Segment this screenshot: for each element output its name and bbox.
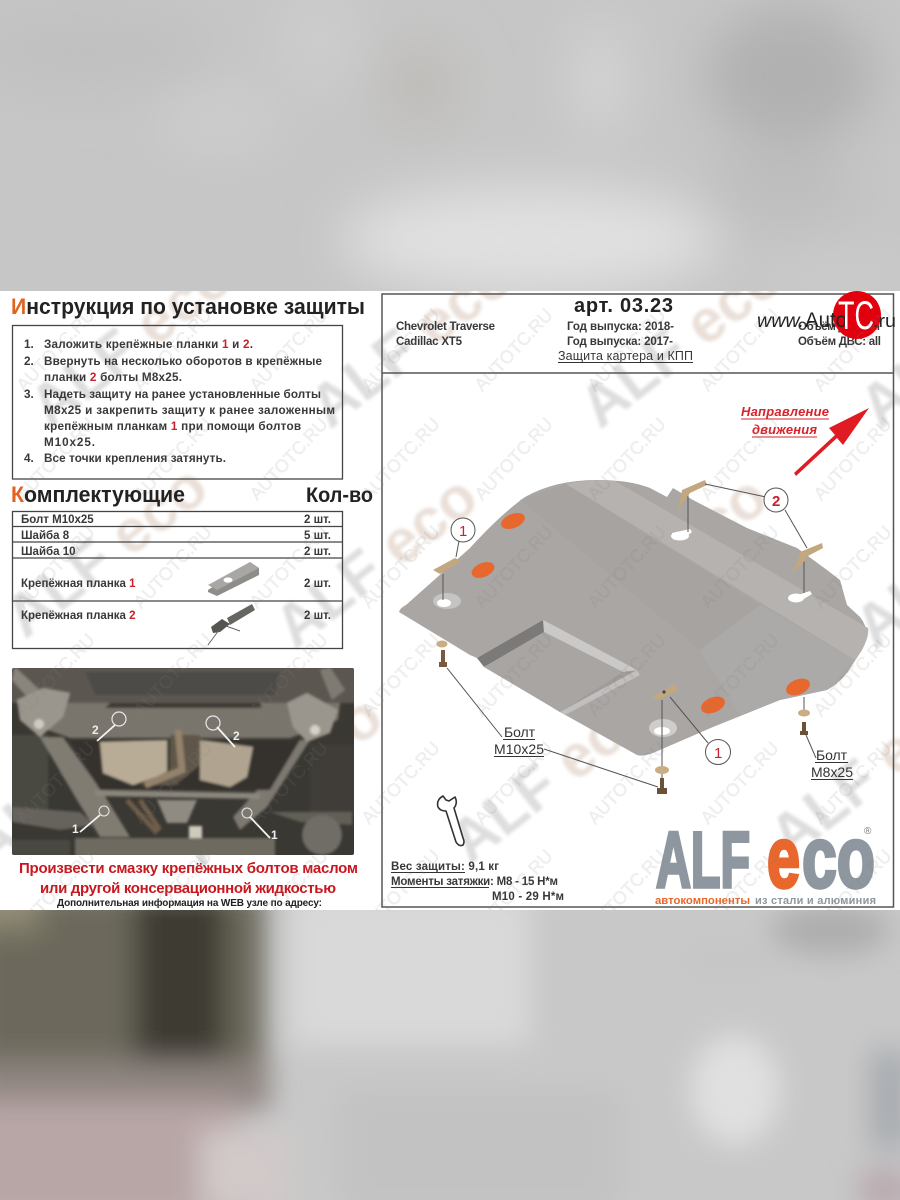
plate right section — [700, 605, 855, 715]
AUTOTC.RU watermarks: AUTOTC.RU — [246, 630, 332, 720]
panel: product drawing frame — [382, 294, 894, 907]
AUTOTC.RU watermarks: AUTOTC.RU — [358, 846, 444, 936]
AUTOTC.RU watermarks: AUTOTC.RU — [358, 738, 444, 828]
background ALF eco watermarks — [0, 242, 900, 880]
AUTOTC.RU watermarks: AUTOTC.RU — [584, 305, 670, 395]
AUTOTC.RU watermarks: AUTOTC.RU — [246, 738, 332, 828]
blurred background top — [0, 0, 900, 310]
callout: number 1 lower: 1 — [714, 745, 722, 762]
logo: AutoTC website stamp — [757, 291, 896, 339]
step list text: 1. — [24, 338, 34, 351]
table: components list: Шайба 10 — [21, 546, 76, 558]
table: components list: Крепёжная планка 1 — [21, 578, 136, 590]
heading: components: Комплектующие — [11, 482, 185, 507]
label: bolt M10x25: Болт — [504, 724, 536, 740]
header: vehicle models: Chevrolet Traverse — [396, 321, 495, 333]
icon: mounting plank 1 — [208, 562, 259, 596]
AUTOTC.RU watermarks: AUTOTC.RU — [130, 630, 216, 720]
header: model years and product: Год выпуска: 2017- — [567, 336, 673, 348]
header: article number: арт. 03.23 — [574, 295, 673, 317]
callout: number 1 lower — [706, 740, 730, 764]
AUTOTC.RU watermarks: AUTOTC.RU — [130, 738, 216, 828]
mounting point markers — [80, 712, 270, 838]
AUTOTC.RU watermarks: AUTOTC.RU — [584, 738, 670, 828]
table: components list: 2 шт. — [304, 546, 331, 558]
AUTOTC.RU watermarks: AUTOTC.RU — [471, 630, 557, 720]
logo: ALF eco: e — [767, 810, 800, 906]
table: components list: Шайба 8 — [21, 530, 70, 542]
header: engine volume — [798, 321, 881, 348]
web info note: Дополнительная информация на WEB узле по адресу: — [57, 897, 322, 909]
header: engine volume: Объём ДВС: all — [798, 321, 880, 333]
label: bolt M8x25: M8x25 — [811, 764, 853, 780]
step list text: 2. — [24, 355, 34, 368]
plate left band — [520, 484, 760, 650]
photo labels: 2 — [92, 723, 99, 737]
AUTOTC.RU watermarks: AUTOTC.RU — [13, 305, 99, 395]
specs: weight and tightening torque — [391, 861, 564, 903]
lubrication note: или другой консервационной жидкостью — [40, 880, 336, 897]
AUTOTC.RU watermarks: AUTOTC.RU — [697, 305, 783, 395]
table: components list — [12, 512, 342, 648]
AUTOTC.RU watermarks: AUTOTC.RU — [13, 738, 99, 828]
AUTOTC.RU watermarks: AUTOTC.RU — [697, 522, 783, 612]
AUTOTC.RU watermarks: AUTOTC.RU — [810, 414, 896, 504]
header: engine volume: Объём ДВС: all — [798, 336, 881, 348]
step list text: планки 2 болты M8x25. — [44, 371, 182, 384]
table: components list: 2 шт. — [304, 578, 331, 590]
AUTOTC.RU watermarks: AUTOTC.RU — [810, 738, 896, 828]
callout: number 2 — [764, 488, 788, 512]
AUTOTC.RU watermarks: AUTOTC.RU — [130, 414, 216, 504]
background ALF eco watermarks: ALF eco — [567, 242, 795, 440]
mounting holes — [433, 529, 812, 737]
specs: weight and tightening torque: Моменты затяжки: M8 - 15 Н*м — [391, 876, 558, 888]
AUTOTC.RU watermarks: AUTOTC.RU — [584, 414, 670, 504]
direction of travel label: Направление — [741, 404, 829, 419]
step list text: 3. — [24, 388, 34, 401]
AUTOTC.RU watermarks: AUTOTC.RU — [130, 305, 216, 395]
background ALF eco watermarks: ALF eco — [17, 242, 245, 440]
AUTOTC.RU watermarks: AUTOTC.RU — [471, 846, 557, 936]
logo: ALF eco — [655, 810, 876, 907]
logo: AutoTC website stamp: TC — [838, 294, 874, 338]
label: bolt M8x25: Болт — [816, 747, 848, 763]
AUTOTC.RU watermarks: AUTOTC.RU — [13, 630, 99, 720]
logo: ALF eco: ALF — [656, 815, 750, 904]
bolts and washers — [436, 640, 810, 794]
logo: ALF eco: автокомпоненты — [655, 895, 750, 907]
AUTOTC.RU watermarks: AUTOTC.RU — [246, 846, 332, 936]
label: bolt M10x25: M10x25 — [494, 741, 544, 757]
lubrication note — [19, 860, 358, 897]
specs: weight and tightening torque: M10 - 29 Н*м — [492, 891, 564, 903]
logo: ALF eco: ® — [864, 826, 872, 837]
background ALF eco watermarks: ALF eco — [437, 677, 665, 875]
logo: AutoTC website stamp: Auto — [805, 309, 847, 332]
logo: AutoTC website stamp: .ru — [873, 311, 896, 331]
logo: AutoTC website stamp: www. — [757, 311, 804, 332]
photo labels: 1 — [271, 828, 278, 842]
direction of travel label: движения — [752, 422, 817, 437]
header: model years and product: Защита картера и КПП — [558, 349, 693, 363]
leader lines — [447, 484, 816, 787]
background ALF eco watermarks: ALF eco — [167, 682, 395, 880]
step list text: M10x25. — [44, 436, 95, 449]
AUTOTC.RU watermarks — [13, 305, 896, 936]
logo: ALF eco: co — [802, 810, 875, 906]
blurred background bottom — [0, 890, 900, 1200]
header: model years and product — [558, 321, 693, 363]
direction of travel label — [741, 404, 829, 437]
AUTOTC.RU watermarks: AUTOTC.RU — [471, 738, 557, 828]
AUTOTC.RU watermarks: AUTOTC.RU — [810, 522, 896, 612]
photo labels — [72, 723, 278, 842]
photo labels: 2 — [233, 729, 240, 743]
step list text: крепёжным планкам 1 при помощи болтов — [44, 420, 301, 433]
white sheet — [0, 291, 900, 910]
background ALF eco watermarks: ALF eco — [552, 462, 780, 660]
table: components list: 2 шт. — [304, 610, 331, 622]
AUTOTC.RU watermarks: AUTOTC.RU — [810, 846, 896, 936]
AUTOTC.RU watermarks: AUTOTC.RU — [471, 305, 557, 395]
AUTOTC.RU watermarks: AUTOTC.RU — [584, 846, 670, 936]
step list text: 4. — [24, 452, 34, 465]
AUTOTC.RU watermarks: AUTOTC.RU — [697, 738, 783, 828]
table: components list: 5 шт. — [304, 530, 331, 542]
header: vehicle models: Cadillac XT5 — [396, 336, 463, 348]
background ALF eco watermarks: ALF eco — [262, 462, 490, 660]
AUTOTC.RU watermarks: AUTOTC.RU — [584, 630, 670, 720]
AUTOTC.RU watermarks: AUTOTC.RU — [471, 414, 557, 504]
AUTOTC.RU watermarks: AUTOTC.RU — [697, 630, 783, 720]
AUTOTC.RU watermarks: AUTOTC.RU — [697, 846, 783, 936]
AUTOTC.RU watermarks: AUTOTC.RU — [246, 522, 332, 612]
table: components list: Крепёжная планка 2 — [21, 610, 136, 622]
logo: ALF eco: из стали и алюминия — [755, 895, 876, 907]
lubrication note: Произвести смазку крепёжных болтов маслом — [19, 860, 358, 877]
specs: weight and tightening torque: Вес защиты: 9,1 кг — [391, 861, 499, 873]
background ALF eco watermarks: ALF eco — [297, 242, 525, 440]
AUTOTC.RU watermarks: AUTOTC.RU — [358, 522, 444, 612]
step list text — [24, 338, 335, 465]
orange tags — [469, 510, 812, 717]
icon: wrench — [438, 796, 464, 846]
AUTOTC.RU watermarks: AUTOTC.RU — [246, 305, 332, 395]
AUTOTC.RU watermarks: AUTOTC.RU — [130, 522, 216, 612]
step list text: Ввернуть на несколько оборотов в крепёжные — [44, 355, 322, 368]
header: model years and product: Год выпуска: 2018- — [567, 321, 674, 333]
heading: quantity: Кол-во — [306, 484, 373, 507]
AUTOTC.RU watermarks: AUTOTC.RU — [358, 414, 444, 504]
step list text: Все точки крепления затянуть. — [44, 452, 226, 465]
AUTOTC.RU watermarks: AUTOTC.RU — [697, 414, 783, 504]
icon: mounting plank 2 — [208, 604, 255, 645]
AUTOTC.RU watermarks: AUTOTC.RU — [13, 522, 99, 612]
callout: number 1 upper — [451, 518, 475, 542]
arrow: direction of travel — [794, 408, 869, 476]
AUTOTC.RU watermarks: AUTOTC.RU — [584, 522, 670, 612]
photo: vehicle underbody with mounting points — [10, 667, 356, 857]
callout: number 2: 2 — [772, 493, 780, 510]
diagram: skid plate — [399, 480, 868, 794]
label: bolt M8x25 — [811, 747, 853, 780]
table: components list: 2 шт. — [304, 514, 331, 526]
AUTOTC.RU watermarks: AUTOTC.RU — [810, 630, 896, 720]
AUTOTC.RU watermarks: AUTOTC.RU — [13, 846, 99, 936]
AUTOTC.RU watermarks: AUTOTC.RU — [246, 414, 332, 504]
heading: installation instructions: Инструкция по установке защиты — [11, 294, 365, 319]
photo labels: 1 — [72, 822, 79, 836]
panel: instruction steps — [12, 326, 342, 479]
callout: number 1 upper: 1 — [459, 523, 467, 540]
brackets and pins — [433, 480, 823, 790]
step list text: Надеть защиту на ранее установленные болты — [44, 388, 321, 401]
step list text: M8x25 и закрепить защиту к ранее заложенным — [44, 404, 335, 417]
step list text: Заложить крепёжные планки 1 и 2. — [44, 338, 253, 351]
AUTOTC.RU watermarks: AUTOTC.RU — [471, 522, 557, 612]
plate light band — [566, 480, 868, 660]
AUTOTC.RU watermarks: AUTOTC.RU — [358, 630, 444, 720]
table: components list: Болт M10x25 — [21, 514, 94, 526]
AUTOTC.RU watermarks: AUTOTC.RU — [130, 846, 216, 936]
gearbox pocket — [477, 620, 640, 715]
AUTOTC.RU watermarks: AUTOTC.RU — [810, 305, 896, 395]
AUTOTC.RU watermarks: AUTOTC.RU — [13, 414, 99, 504]
label: bolt M10x25 — [494, 724, 544, 757]
header: vehicle models — [396, 321, 495, 348]
AUTOTC.RU watermarks: AUTOTC.RU — [358, 305, 444, 395]
